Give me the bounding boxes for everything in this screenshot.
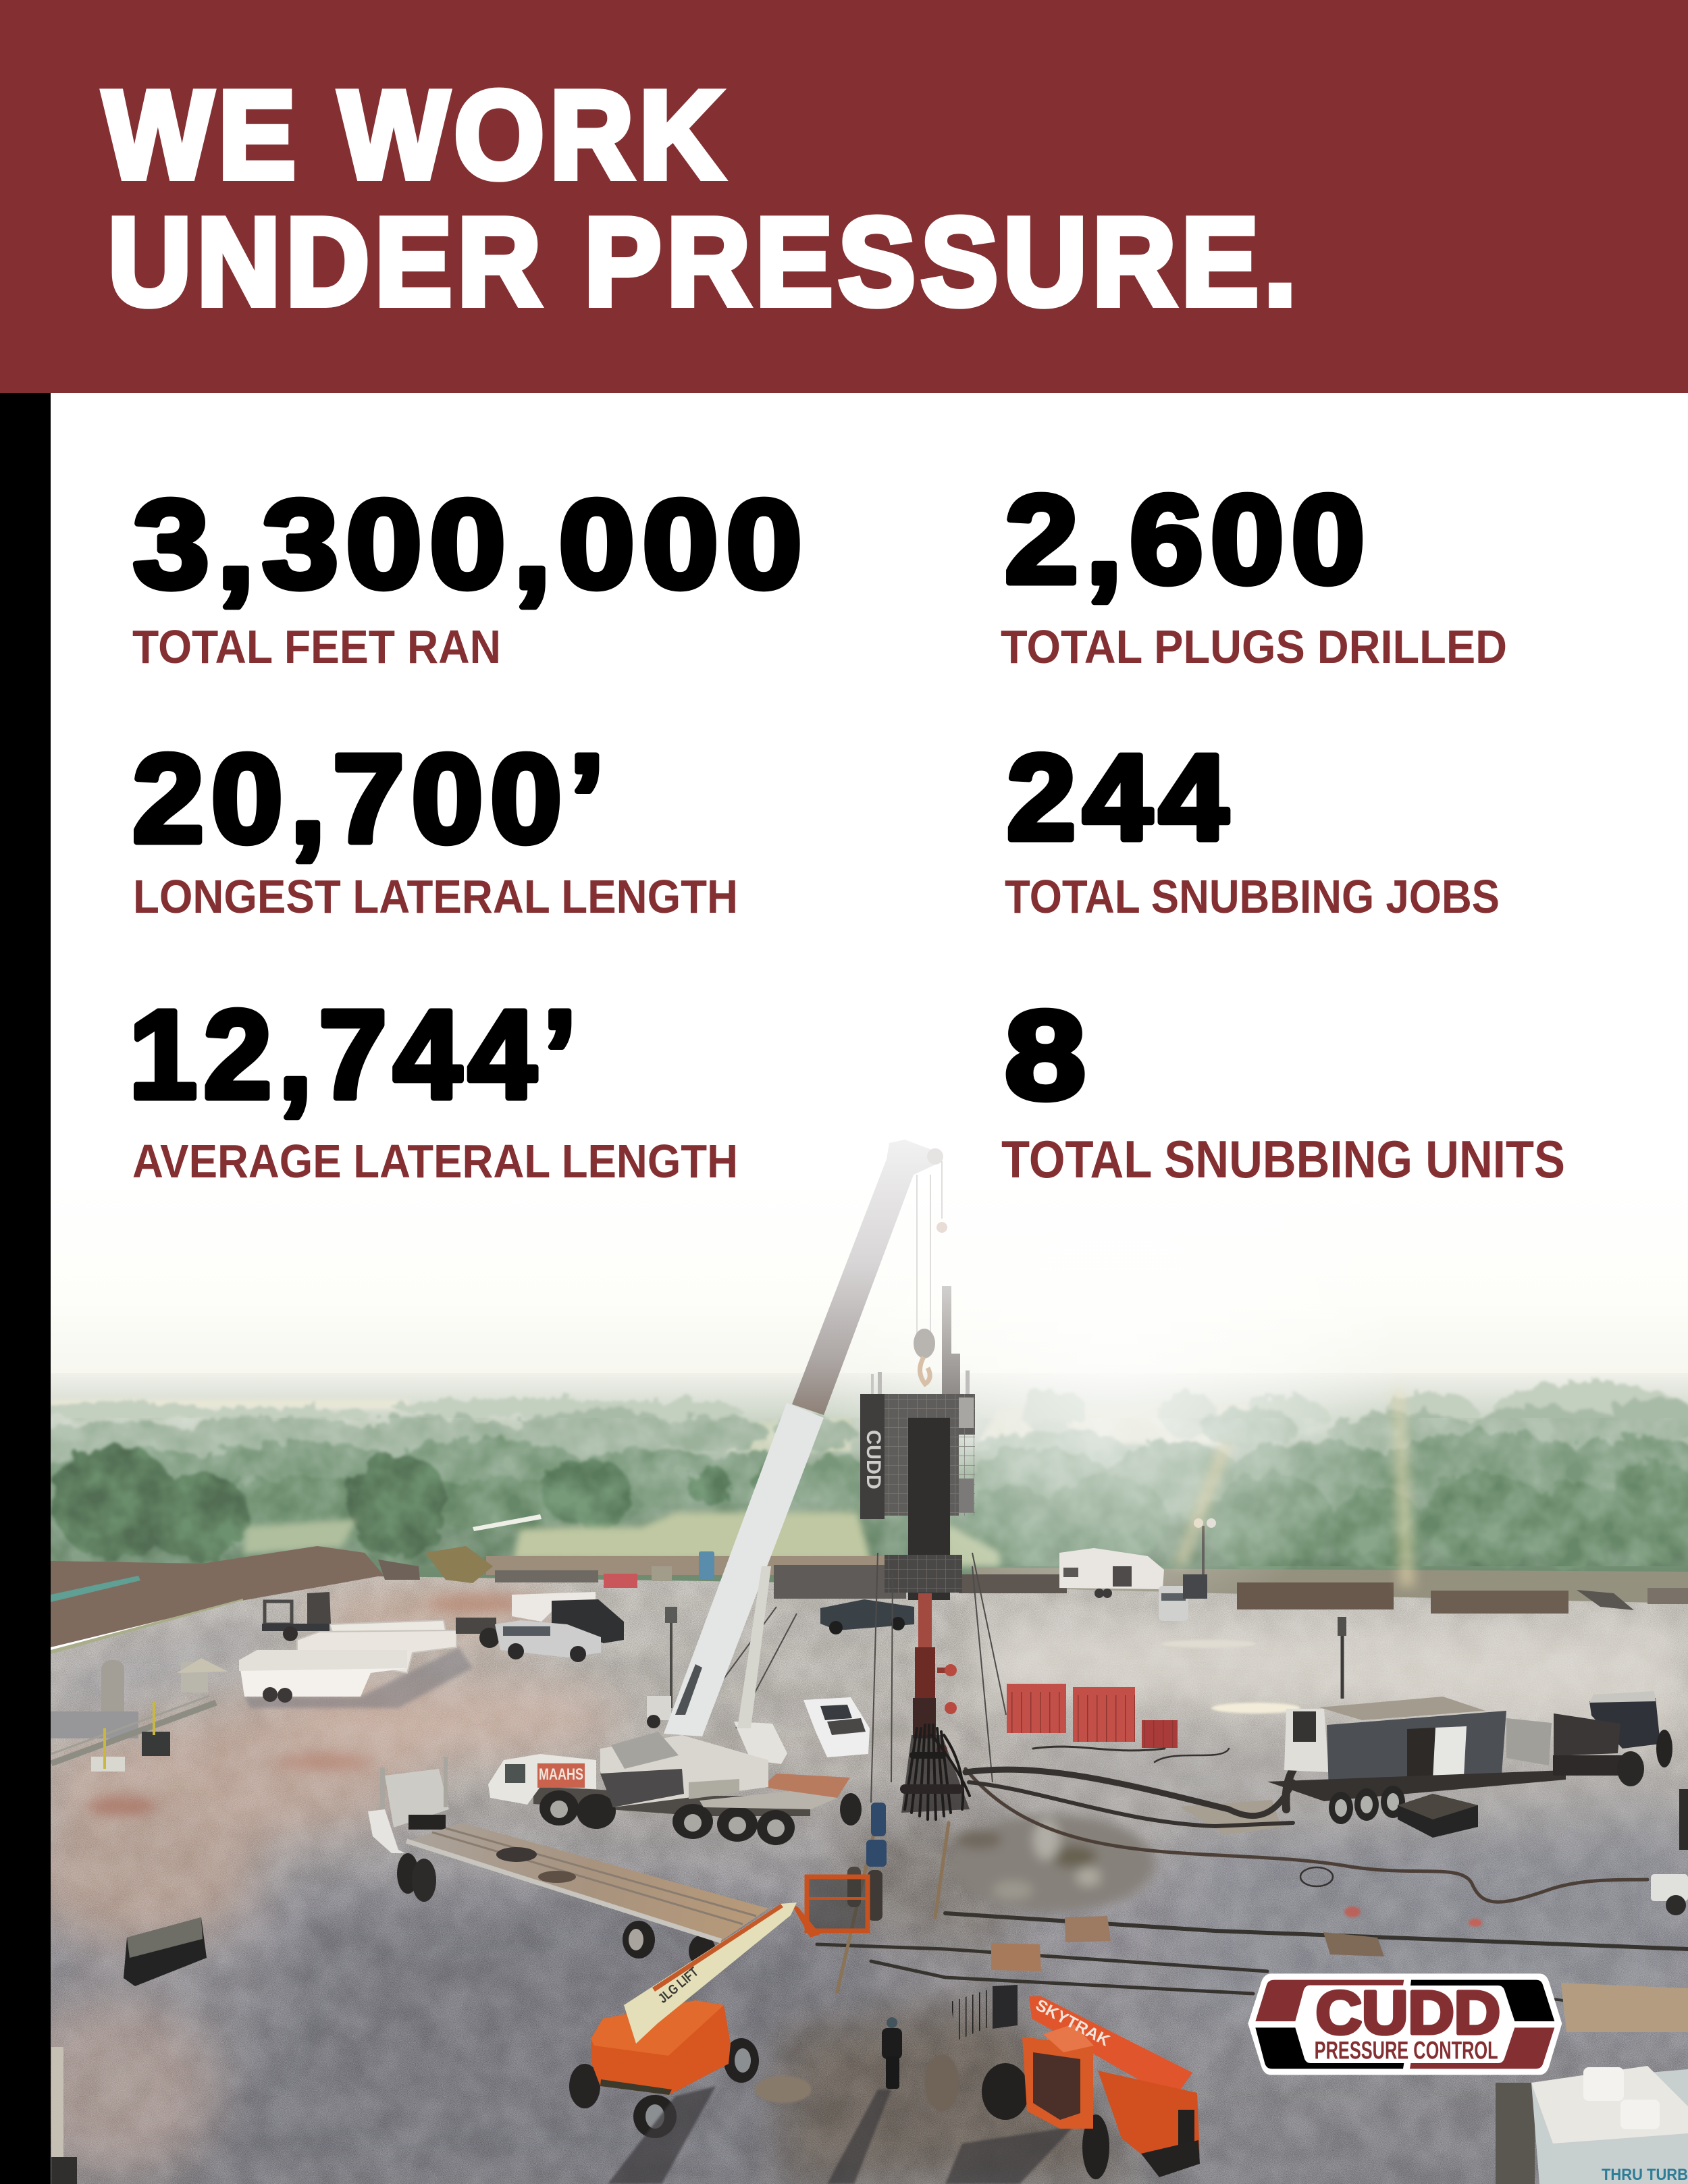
steel skids (991, 1916, 1384, 1971)
boom lift machine (569, 1902, 797, 2138)
sun rays (1173, 1391, 1415, 1587)
guy wires (702, 1553, 1006, 1803)
crane superstructure (600, 1732, 768, 1807)
puddles (1161, 1640, 1300, 1713)
bulldozers (378, 1546, 493, 1583)
crane carrier and cab (488, 1754, 850, 1809)
generator (647, 1696, 671, 1728)
wheel hubs (550, 1801, 785, 1837)
silver pickup (495, 1620, 601, 1662)
separator vessel and fenced equipment (51, 1658, 228, 1772)
ground colour patches (14, 1576, 1688, 2184)
stat: total snubbing jobs: 244 (1007, 730, 1235, 865)
parked white trailers (239, 1620, 456, 1703)
flat trailer rack (262, 1592, 331, 1641)
stat: longest lateral length: LONGEST LATERAL LENGTH (133, 870, 738, 923)
gravel pad (14, 1576, 1688, 2184)
telehandler lettering: SKYTRAK (1032, 1996, 1113, 2050)
edge equipment (1651, 1789, 1688, 1915)
stat: total plugs drilled (1001, 470, 1507, 673)
flatbed trailer (397, 1823, 768, 1967)
telescopic boom, upper sections (792, 1140, 943, 1415)
photo sky (51, 1320, 1688, 1373)
portable toilet (699, 1551, 714, 1579)
stand light near crane (665, 1607, 677, 1708)
sun glow (907, 1344, 1363, 1593)
rig banner lettering: CUDD (862, 1430, 885, 1489)
black job box (1398, 1794, 1478, 1838)
title (103, 65, 1302, 331)
logo: Cudd Pressure Control (1248, 1973, 1562, 2075)
stat: longest lateral length: 20,700’ (132, 729, 612, 869)
crane lower chassis (533, 1786, 810, 1816)
title: WE WORK (103, 65, 729, 204)
semi tractor (368, 1757, 449, 1853)
stat: total snubbing jobs (1005, 730, 1500, 923)
light tower at rear (1183, 1518, 1216, 1599)
telehandler machine (982, 1996, 1200, 2179)
white pickup (803, 1697, 870, 1757)
white pipeline (473, 1514, 542, 1531)
workers near wellhead (847, 1803, 887, 1921)
red cylinder cages (1007, 1684, 1178, 1748)
distant landscape and tree line (34, 1373, 1688, 1658)
rig mast and work platforms (860, 1394, 975, 1600)
stat: total feet ran (132, 475, 810, 673)
light tower at right (1338, 1617, 1346, 1699)
rig top and travelling block (871, 1286, 970, 1408)
red cart (604, 1574, 637, 1588)
grey loader (652, 1566, 672, 1581)
boom lift lettering: JLG LIFT (656, 1965, 702, 2006)
silver pickup near trailer (1159, 1586, 1188, 1621)
hydraulic hoses (966, 1745, 1647, 1902)
stat: total feet ran: TOTAL FEET RAN (132, 620, 501, 673)
stat: average lateral length: 12,744’ (129, 985, 583, 1125)
crane operator cab (734, 1722, 787, 1764)
stat: total snubbing jobs: TOTAL SNUBBING JOBS (1005, 870, 1500, 923)
hook and hoist lines (917, 1161, 947, 1340)
grass strip (51, 1599, 243, 1658)
red soil stains (88, 1594, 547, 1815)
boom shadow edge (675, 1664, 702, 1715)
site tarp (1180, 1800, 1282, 1835)
stat: longest lateral length (132, 729, 738, 923)
stat: total plugs drilled: 2,600 (1005, 470, 1372, 610)
distant fence strip (974, 1568, 1688, 1603)
telehandler fork carriage (951, 1985, 1018, 2041)
person walking (882, 2017, 902, 2089)
foreground puddles (755, 2054, 959, 2111)
dirt right of way (51, 1546, 385, 1647)
tree canopy mottling (51, 1418, 1688, 1566)
stat: total plugs drilled: TOTAL PLUGS DRILLED (1001, 620, 1507, 673)
crane door lettering: MAAHS (539, 1765, 583, 1784)
logo: Cudd Pressure Control: PRESSURE CONTROL (1315, 2036, 1498, 2064)
back fence and stacked pipe (486, 1556, 1688, 1614)
dark pickup (820, 1599, 914, 1634)
post base (51, 2157, 77, 2184)
black tractor with cage (1553, 1691, 1672, 1786)
matting lower right (1561, 1983, 1688, 2032)
muddy patch near wellhead (952, 1815, 1155, 1912)
header band (0, 0, 1688, 393)
stat: total snubbing units: TOTAL SNUBBING UNITS (1001, 1129, 1565, 1189)
cables hanging at wellhead (905, 1725, 970, 1819)
wellhead stack (913, 1593, 957, 1755)
green pipe (51, 1576, 140, 1602)
stat: average lateral length: AVERAGE LATERAL LENGTH (132, 1135, 738, 1188)
trailer ground shadows (244, 1647, 473, 1708)
pipe lines on ground (817, 1816, 1688, 2015)
cable bundle at wellhead (901, 1735, 970, 1813)
photo: oil well site with crane and rig (14, 1053, 1688, 2184)
gravel texture (51, 1576, 1688, 2184)
black steel box (124, 1917, 207, 1986)
stat: total feet ran: 3,300,000 (133, 475, 810, 614)
title: UNDER PRESSURE. (108, 192, 1302, 331)
service rack beside RV (1496, 2083, 1535, 2184)
left black sidebar (0, 393, 51, 2184)
stat: average lateral length (129, 985, 738, 1188)
telescopic boom, white base section (664, 1403, 824, 1736)
chemical tank (1506, 1718, 1552, 1765)
post at lower left (51, 2047, 63, 2162)
white travel trailer (1059, 1548, 1164, 1598)
marks on pad (1344, 1907, 1482, 1927)
container trailer (1267, 1697, 1566, 1824)
large mottling on pad (51, 1576, 1688, 2184)
shadows at foreground (608, 2086, 1074, 2184)
crane carrier wheels (539, 1790, 862, 1845)
boom derrick strut (737, 1566, 771, 1728)
white RV bottom right (1531, 2066, 1688, 2184)
stat: total snubbing units: 8 (1005, 986, 1086, 1125)
white box truck with black tractor (456, 1592, 624, 1648)
boom lift platform (791, 1877, 868, 1938)
stat: total snubbing units (1001, 986, 1565, 1189)
grass clearings (243, 1512, 999, 1566)
logo: Cudd Pressure Control: CUDD (1316, 1979, 1500, 2047)
